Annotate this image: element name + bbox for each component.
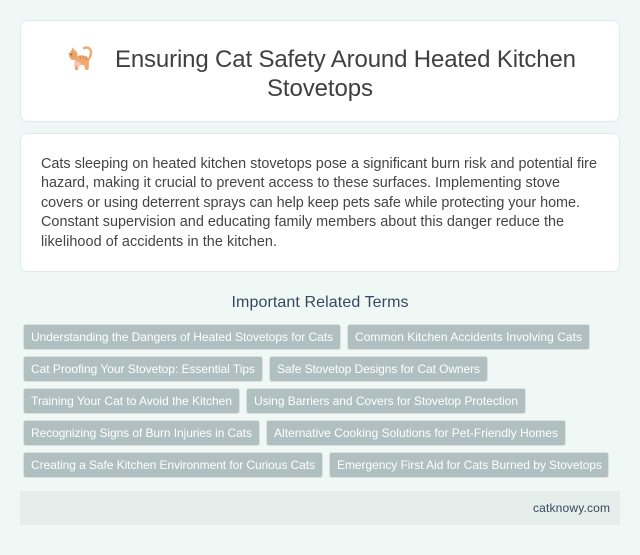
tag [24, 324, 340, 350]
description text: covers or using deterrent sprays can help keep pets safe while protecting your home. [41, 195, 580, 211]
tag [270, 356, 488, 382]
heading: important related terms: Important Related Terms [232, 294, 408, 311]
tag: Safe Stovetop Designs for Cat Owners [277, 362, 480, 376]
tag: Alternative Cooking Solutions for Pet-Friendly Homes [274, 426, 558, 440]
tag [24, 388, 240, 414]
tag: Training Your Cat to Avoid the Kitchen [31, 394, 232, 408]
description text [41, 156, 597, 250]
title: Stovetops [267, 75, 373, 102]
footer [20, 491, 620, 525]
tag [24, 452, 322, 478]
tag [24, 420, 260, 446]
title: Ensuring Cat Safety Around Heated Kitchen [115, 46, 576, 73]
panel: description card [20, 134, 620, 272]
tag: Cat Proofing Your Stovetop: Essential Tips [31, 362, 255, 376]
tag: Understanding the Dangers of Heated Stovetops for Cats [31, 330, 333, 344]
tag: Recognizing Signs of Burn Injuries in Cats [31, 426, 252, 440]
tag: Common Kitchen Accidents Involving Cats [355, 330, 582, 344]
description text: likelihood of accidents in the kitchen. [41, 234, 277, 250]
tag [348, 324, 590, 350]
tag [24, 356, 262, 382]
description text: Constant supervision and educating family members about this danger reduce the [41, 214, 564, 230]
tag [246, 388, 526, 414]
tag: Using Barriers and Covers for Stovetop Protection [254, 394, 518, 408]
tag: Emergency First Aid for Cats Burned by Stovetops [337, 458, 602, 472]
tag [266, 420, 566, 446]
title [115, 46, 576, 102]
tag list [24, 324, 608, 478]
description text: hazard, making it crucial to prevent access to these surfaces. Implementing stove [41, 175, 560, 191]
tag [330, 452, 608, 478]
tag: Creating a Safe Kitchen Environment for Curious Cats [31, 458, 315, 472]
panel: title card [20, 20, 620, 122]
footer: catknowy.com [533, 501, 610, 515]
description text: Cats sleeping on heated kitchen stovetops pose a significant burn risk and potential fire [41, 156, 597, 172]
icon: cat [68, 48, 91, 70]
